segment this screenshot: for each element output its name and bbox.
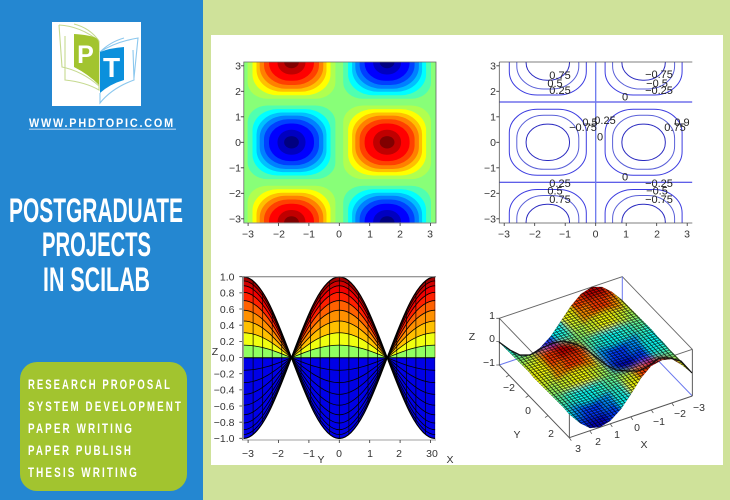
heatmap chart: 3 [427,228,433,240]
side-view wave chart: 0.2 [220,336,235,348]
contour chart: 0.75 [549,70,571,82]
panel: left sidebar [0,0,203,500]
contour chart: −2 [484,188,496,200]
contour chart: 0.75 [549,194,571,206]
contour chart: −1 [559,228,571,240]
3D surface chart: −2 [674,408,686,420]
heatmap chart: −3 [242,228,254,240]
side-view wave chart: −3 [242,448,254,460]
contour chart: −0.75 [569,122,597,134]
contour chart: 0 [622,92,628,104]
contour chart: 1 [490,112,496,124]
heatmap chart: −2 [273,228,285,240]
heatmap chart: −1 [303,228,315,240]
3D surface chart: −1 [483,357,495,369]
heatmap chart: −1 [229,162,241,174]
services box: PAPER WRITING [28,420,134,436]
contour chart: −3 [498,228,510,240]
contour chart: 0.75 [664,122,686,134]
3D surface chart: 0 [634,422,640,434]
contour chart: 0.5 [547,186,563,198]
contour chart: 0 [490,137,496,149]
contour chart [484,62,692,238]
heatmap chart: 2 [397,228,403,240]
website url: WWW.PHDTOPIC.COM [29,116,175,130]
3D surface chart: 1 [489,310,495,322]
side-view wave chart: 0.8 [220,288,235,300]
3D surface chart: Y [513,429,521,441]
heatmap chart: 3 [235,60,241,72]
contour chart: −0.25 [645,85,673,97]
logo: T [103,52,120,83]
side-view wave chart: −0.8 [214,417,235,429]
heatmap chart: 0 [336,228,342,240]
contour chart: 0 [593,228,599,240]
contour chart: 0.25 [549,178,571,190]
side-view wave chart: 30 [426,448,438,460]
3D surface chart: X [640,439,648,451]
3D surface chart: 2 [595,436,601,448]
title: PROJECTS [42,226,151,264]
contour chart: 0 [622,172,628,184]
side-view wave chart: 1 [367,448,373,460]
3D surface chart: 1 [614,429,620,441]
contour chart: 0.9 [674,117,690,129]
side-view wave chart: 0.6 [220,304,235,316]
side-view wave chart: X [446,454,454,466]
3D surface chart: −1 [653,416,665,428]
side-view wave chart: −0.2 [214,368,235,380]
surface mesh [499,287,692,428]
title [9,192,183,299]
3D surface chart: 3 [575,443,581,455]
contour chart: −0.5 [646,78,668,90]
side-view wave chart: −2 [272,448,284,460]
side-view wave chart: −1.0 [214,433,235,445]
side-view wave chart: 0.4 [220,320,235,332]
heatmap chart: 2 [235,86,241,98]
services box: THESIS WRITING [28,464,139,480]
side-view wave chart [212,272,454,466]
title: IN SCILAB [43,261,150,299]
contour chart: 0.25 [594,115,616,127]
contour chart: −0.5 [646,186,668,198]
heatmap chart: 1 [235,112,241,124]
side-view wave chart: 1.0 [220,272,235,284]
3D surface chart: −2 [503,382,515,394]
logo: P [77,41,94,69]
contour chart: −0.75 [645,194,673,206]
services box [20,362,187,491]
services box: SYSTEM DEVELOPMENT [28,398,183,414]
heatmap chart: −2 [229,188,241,200]
contour chart: −3 [484,214,496,226]
side-view wave chart: −0.4 [214,385,235,397]
3D surface chart: 2 [548,428,554,440]
3D surface chart [469,270,705,455]
contour chart: 2 [490,86,496,98]
panel: charts [211,25,723,466]
side-view wave chart: Z [212,346,219,358]
side-view wave chart: Y [317,454,325,466]
heatmap chart: 1 [367,228,373,240]
contour chart: −0.25 [645,178,673,190]
contour chart: 2 [654,228,660,240]
contour chart: 0.25 [549,85,571,97]
contour chart: 3 [684,228,690,240]
contour chart: 0.5 [547,78,563,90]
contour chart: 3 [490,60,496,72]
side-view wave chart: 2 [396,448,402,460]
contour chart: 1 [623,228,629,240]
services box: PAPER PUBLISH [28,442,133,458]
heatmap chart: −3 [229,214,241,226]
3D surface chart: Z [469,331,476,343]
side-view wave chart: 0.0 [220,352,235,364]
3D surface chart: 0 [489,333,495,345]
contour chart: −0.75 [645,69,673,81]
contour chart: −2 [529,228,541,240]
3D surface chart: 0 [525,405,531,417]
services box: RESEARCH PROPOSAL [28,376,172,392]
contour chart: −1 [484,162,496,174]
3D surface chart: −3 [693,402,705,414]
side-view wave chart: 0 [336,448,342,460]
contour chart: 0 [597,132,603,144]
heatmap chart: 0 [235,137,241,149]
side-view wave chart: −0.6 [214,401,235,413]
contour chart: 0.5 [582,117,598,129]
side-view wave chart: −1 [303,448,315,460]
heatmap chart [230,62,436,238]
logo [52,22,141,106]
title: POSTGRADUATE [9,192,183,230]
